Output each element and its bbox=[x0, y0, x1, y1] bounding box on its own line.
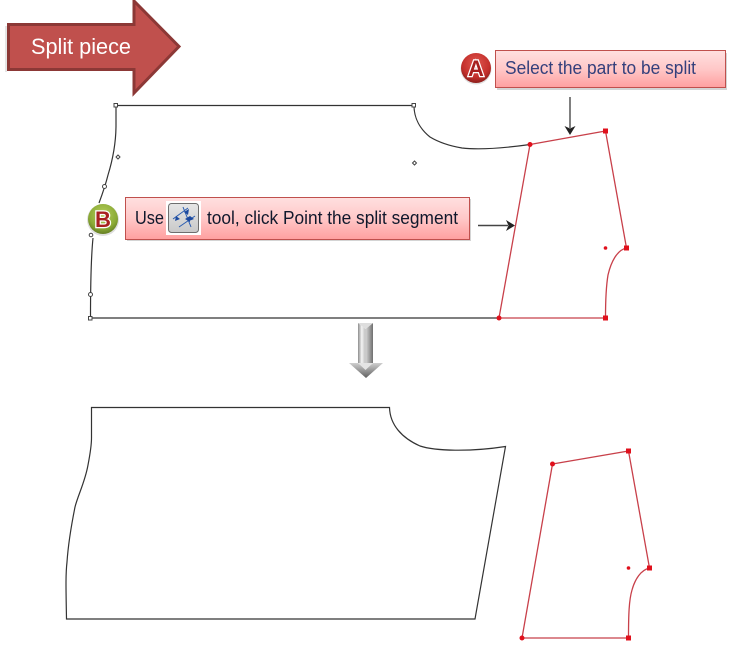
badge B bbox=[87, 204, 119, 236]
callout B text left: Use bbox=[135, 208, 164, 228]
callout A text: Select the part to be split bbox=[505, 58, 696, 78]
callout A box bbox=[496, 50, 726, 88]
title arrow: Split piece bbox=[6, 1, 179, 93]
pointer arrow to top segment bbox=[564, 97, 576, 135]
callout B box bbox=[126, 198, 470, 240]
badge A bbox=[460, 53, 492, 84]
steel down arrow bbox=[349, 323, 383, 378]
badge A: A bbox=[468, 56, 484, 81]
top pattern: main body piece outline bbox=[88, 104, 530, 320]
callout A bbox=[496, 50, 727, 90]
top pattern: selected red part bbox=[496, 128, 629, 320]
icon: split tool bbox=[166, 201, 201, 235]
callout B bbox=[126, 198, 471, 241]
result pattern: body piece bbox=[66, 408, 506, 619]
callout B text right: tool, click Point the split segment bbox=[207, 208, 458, 228]
pointer arrow to split segment bbox=[478, 220, 515, 231]
pattern handle points bbox=[88, 104, 416, 320]
badge B: B bbox=[95, 207, 111, 232]
result pattern: split red piece bbox=[520, 448, 652, 640]
title arrow: Split piece: Split piece bbox=[31, 34, 131, 59]
